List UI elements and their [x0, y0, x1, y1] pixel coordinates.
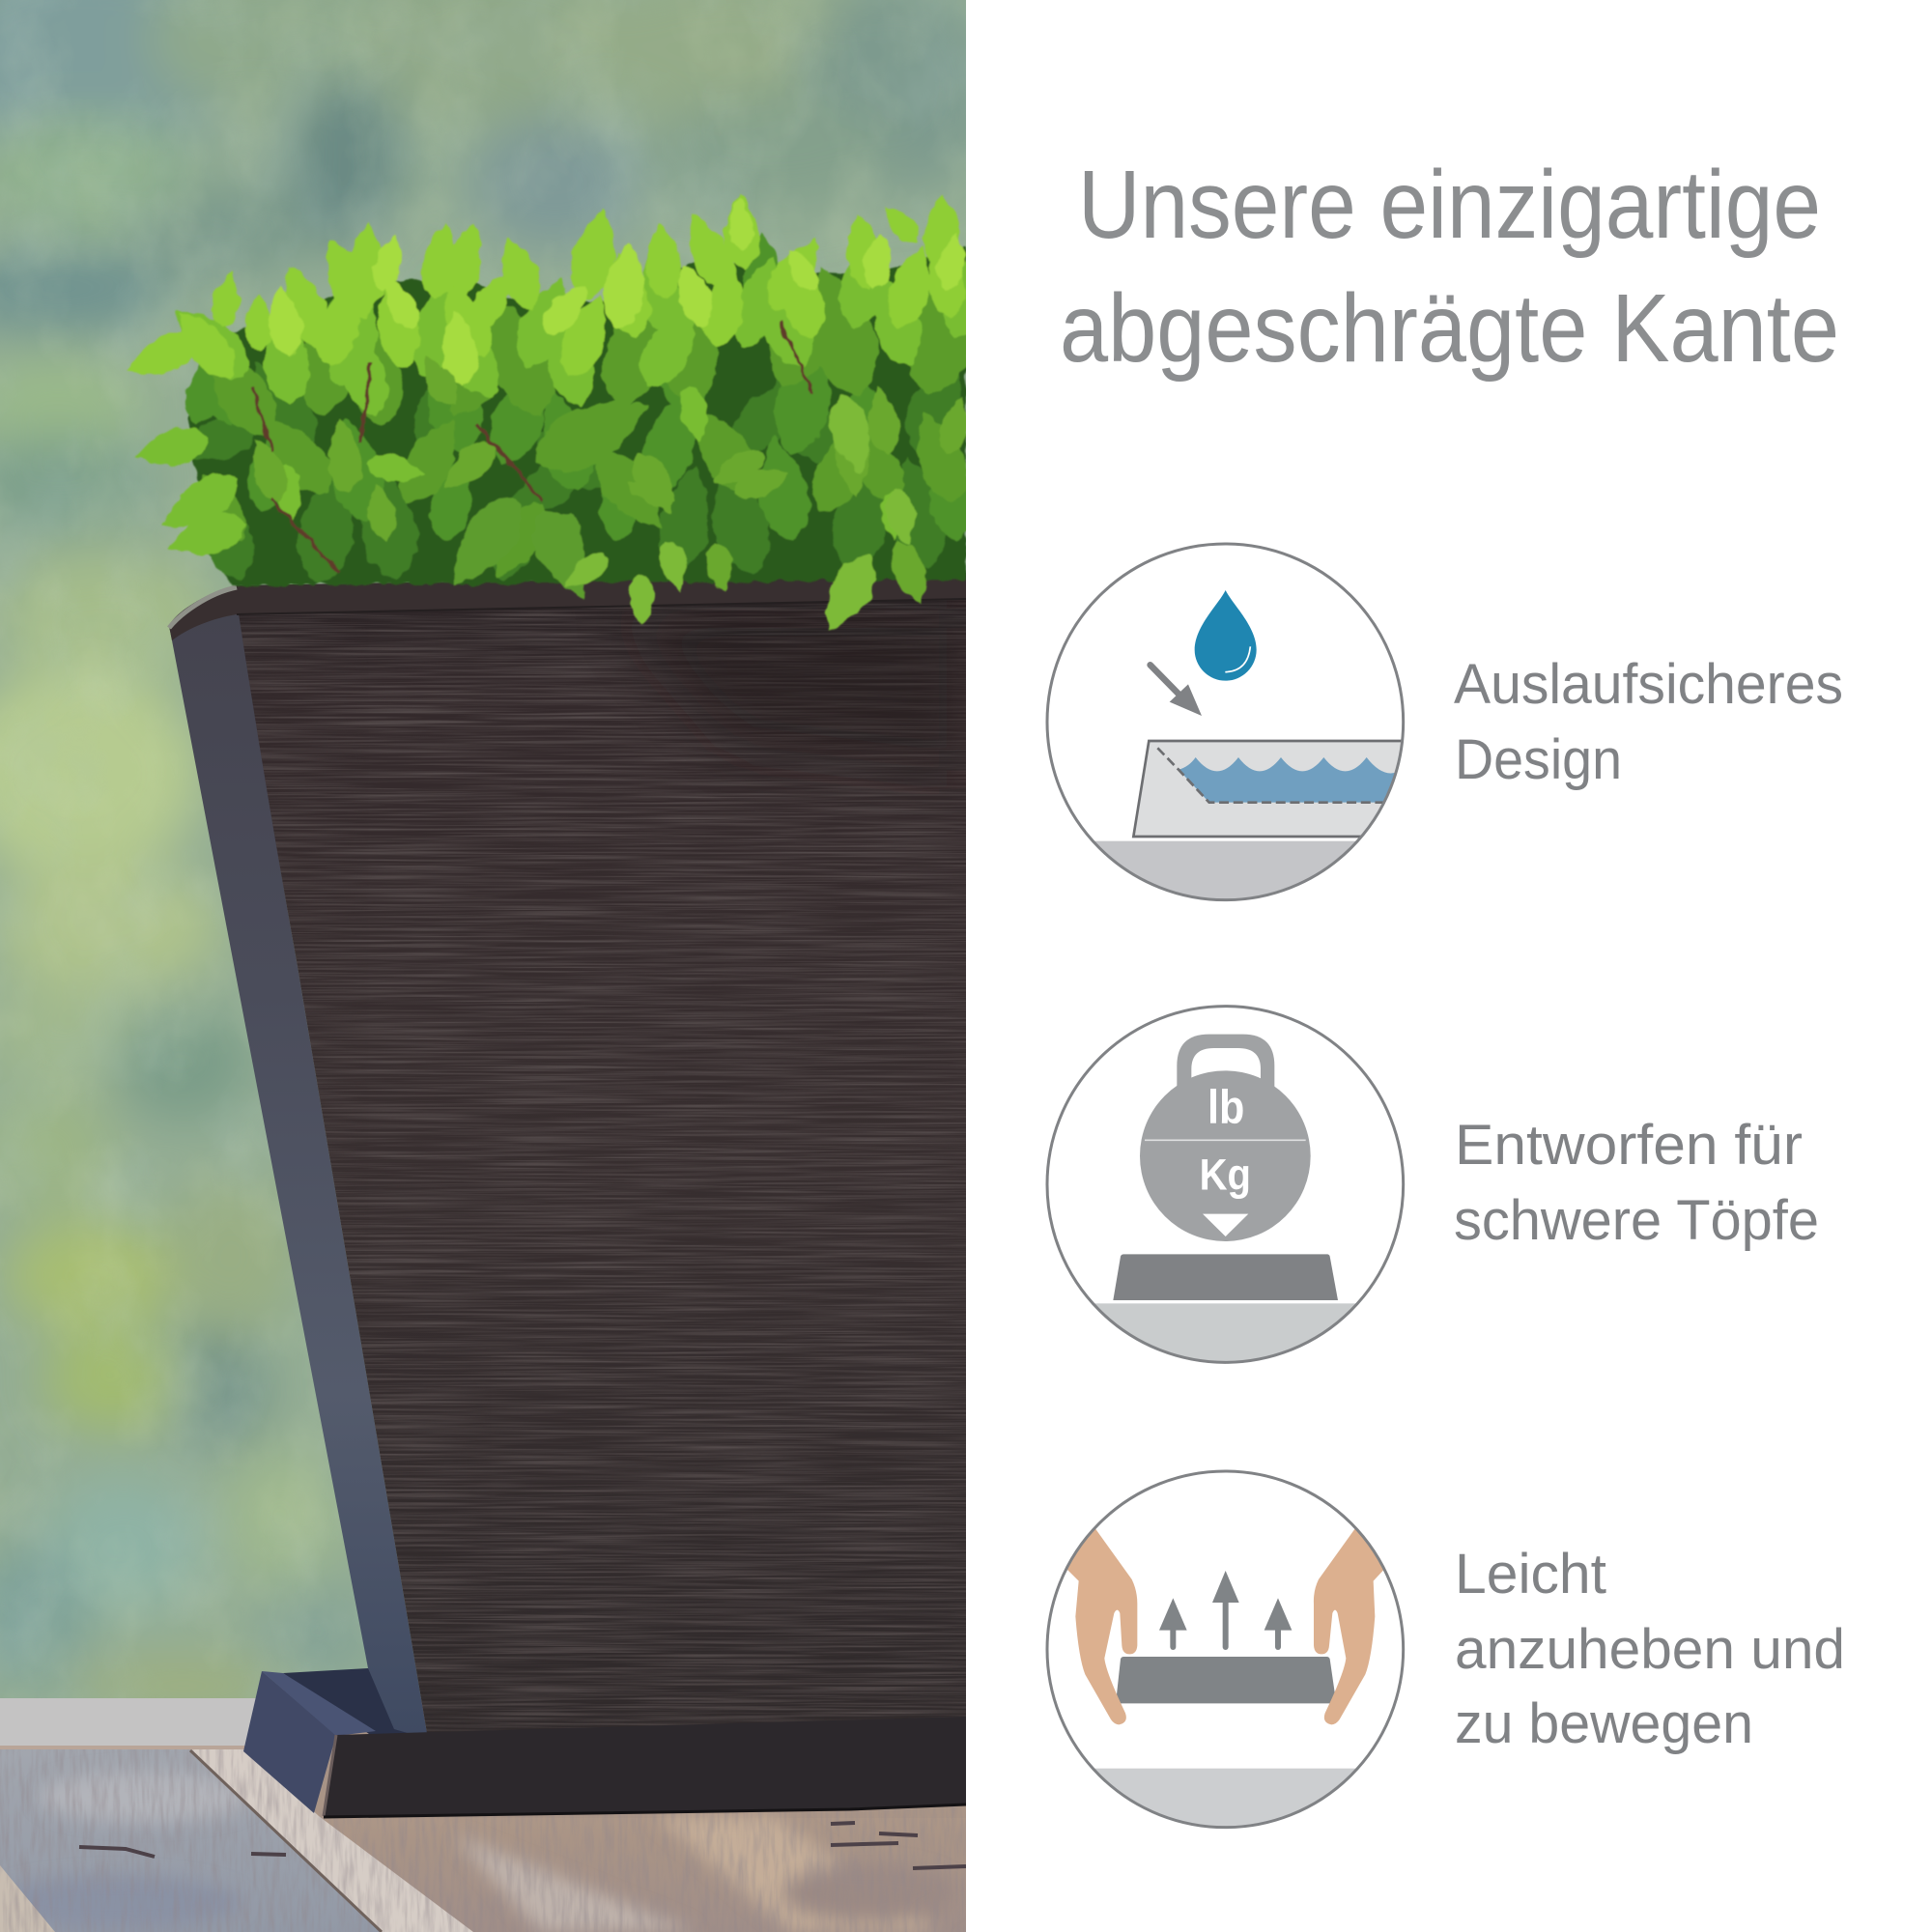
pot front face [222, 570, 976, 1748]
icon: heavy pots: Kg [1200, 1151, 1251, 1200]
title [1060, 151, 1839, 383]
icon: heavy pots [1045, 1005, 1405, 1364]
panel: product photo [0, 0, 999, 1932]
pot side face [169, 585, 428, 1739]
label: heavy pots [1454, 1114, 1819, 1252]
icon: heavy pots: lb [1208, 1081, 1244, 1134]
title: Unsere einzigartige [1078, 151, 1821, 259]
label: heavy pots: Entworfen für [1455, 1114, 1803, 1177]
label: leakproof design: Auslaufsicheres [1454, 653, 1843, 716]
icon: leakproof design [1045, 543, 1405, 902]
panel: white right column [966, 0, 1932, 1932]
label: leakproof design: Design [1455, 728, 1622, 791]
label: easy to lift [1455, 1543, 1845, 1755]
label: leakproof design [1454, 653, 1843, 791]
hanging leaves [434, 391, 922, 641]
foliage [120, 192, 999, 641]
label: easy to lift: Leicht [1455, 1543, 1606, 1605]
label: easy to lift: zu bewegen [1455, 1692, 1753, 1755]
label: easy to lift: anzuheben und [1455, 1618, 1845, 1681]
saucer tray back [243, 1668, 435, 1813]
stems [252, 321, 813, 573]
label: heavy pots: schwere Töpfe [1454, 1189, 1819, 1252]
blurred garden background [0, 0, 995, 1739]
title: abgeschrägte Kante [1060, 274, 1839, 383]
icon: easy to lift [1045, 1470, 1405, 1830]
pot rim [169, 573, 966, 640]
table top [0, 1698, 966, 1932]
saucer tray front [324, 1717, 966, 1817]
